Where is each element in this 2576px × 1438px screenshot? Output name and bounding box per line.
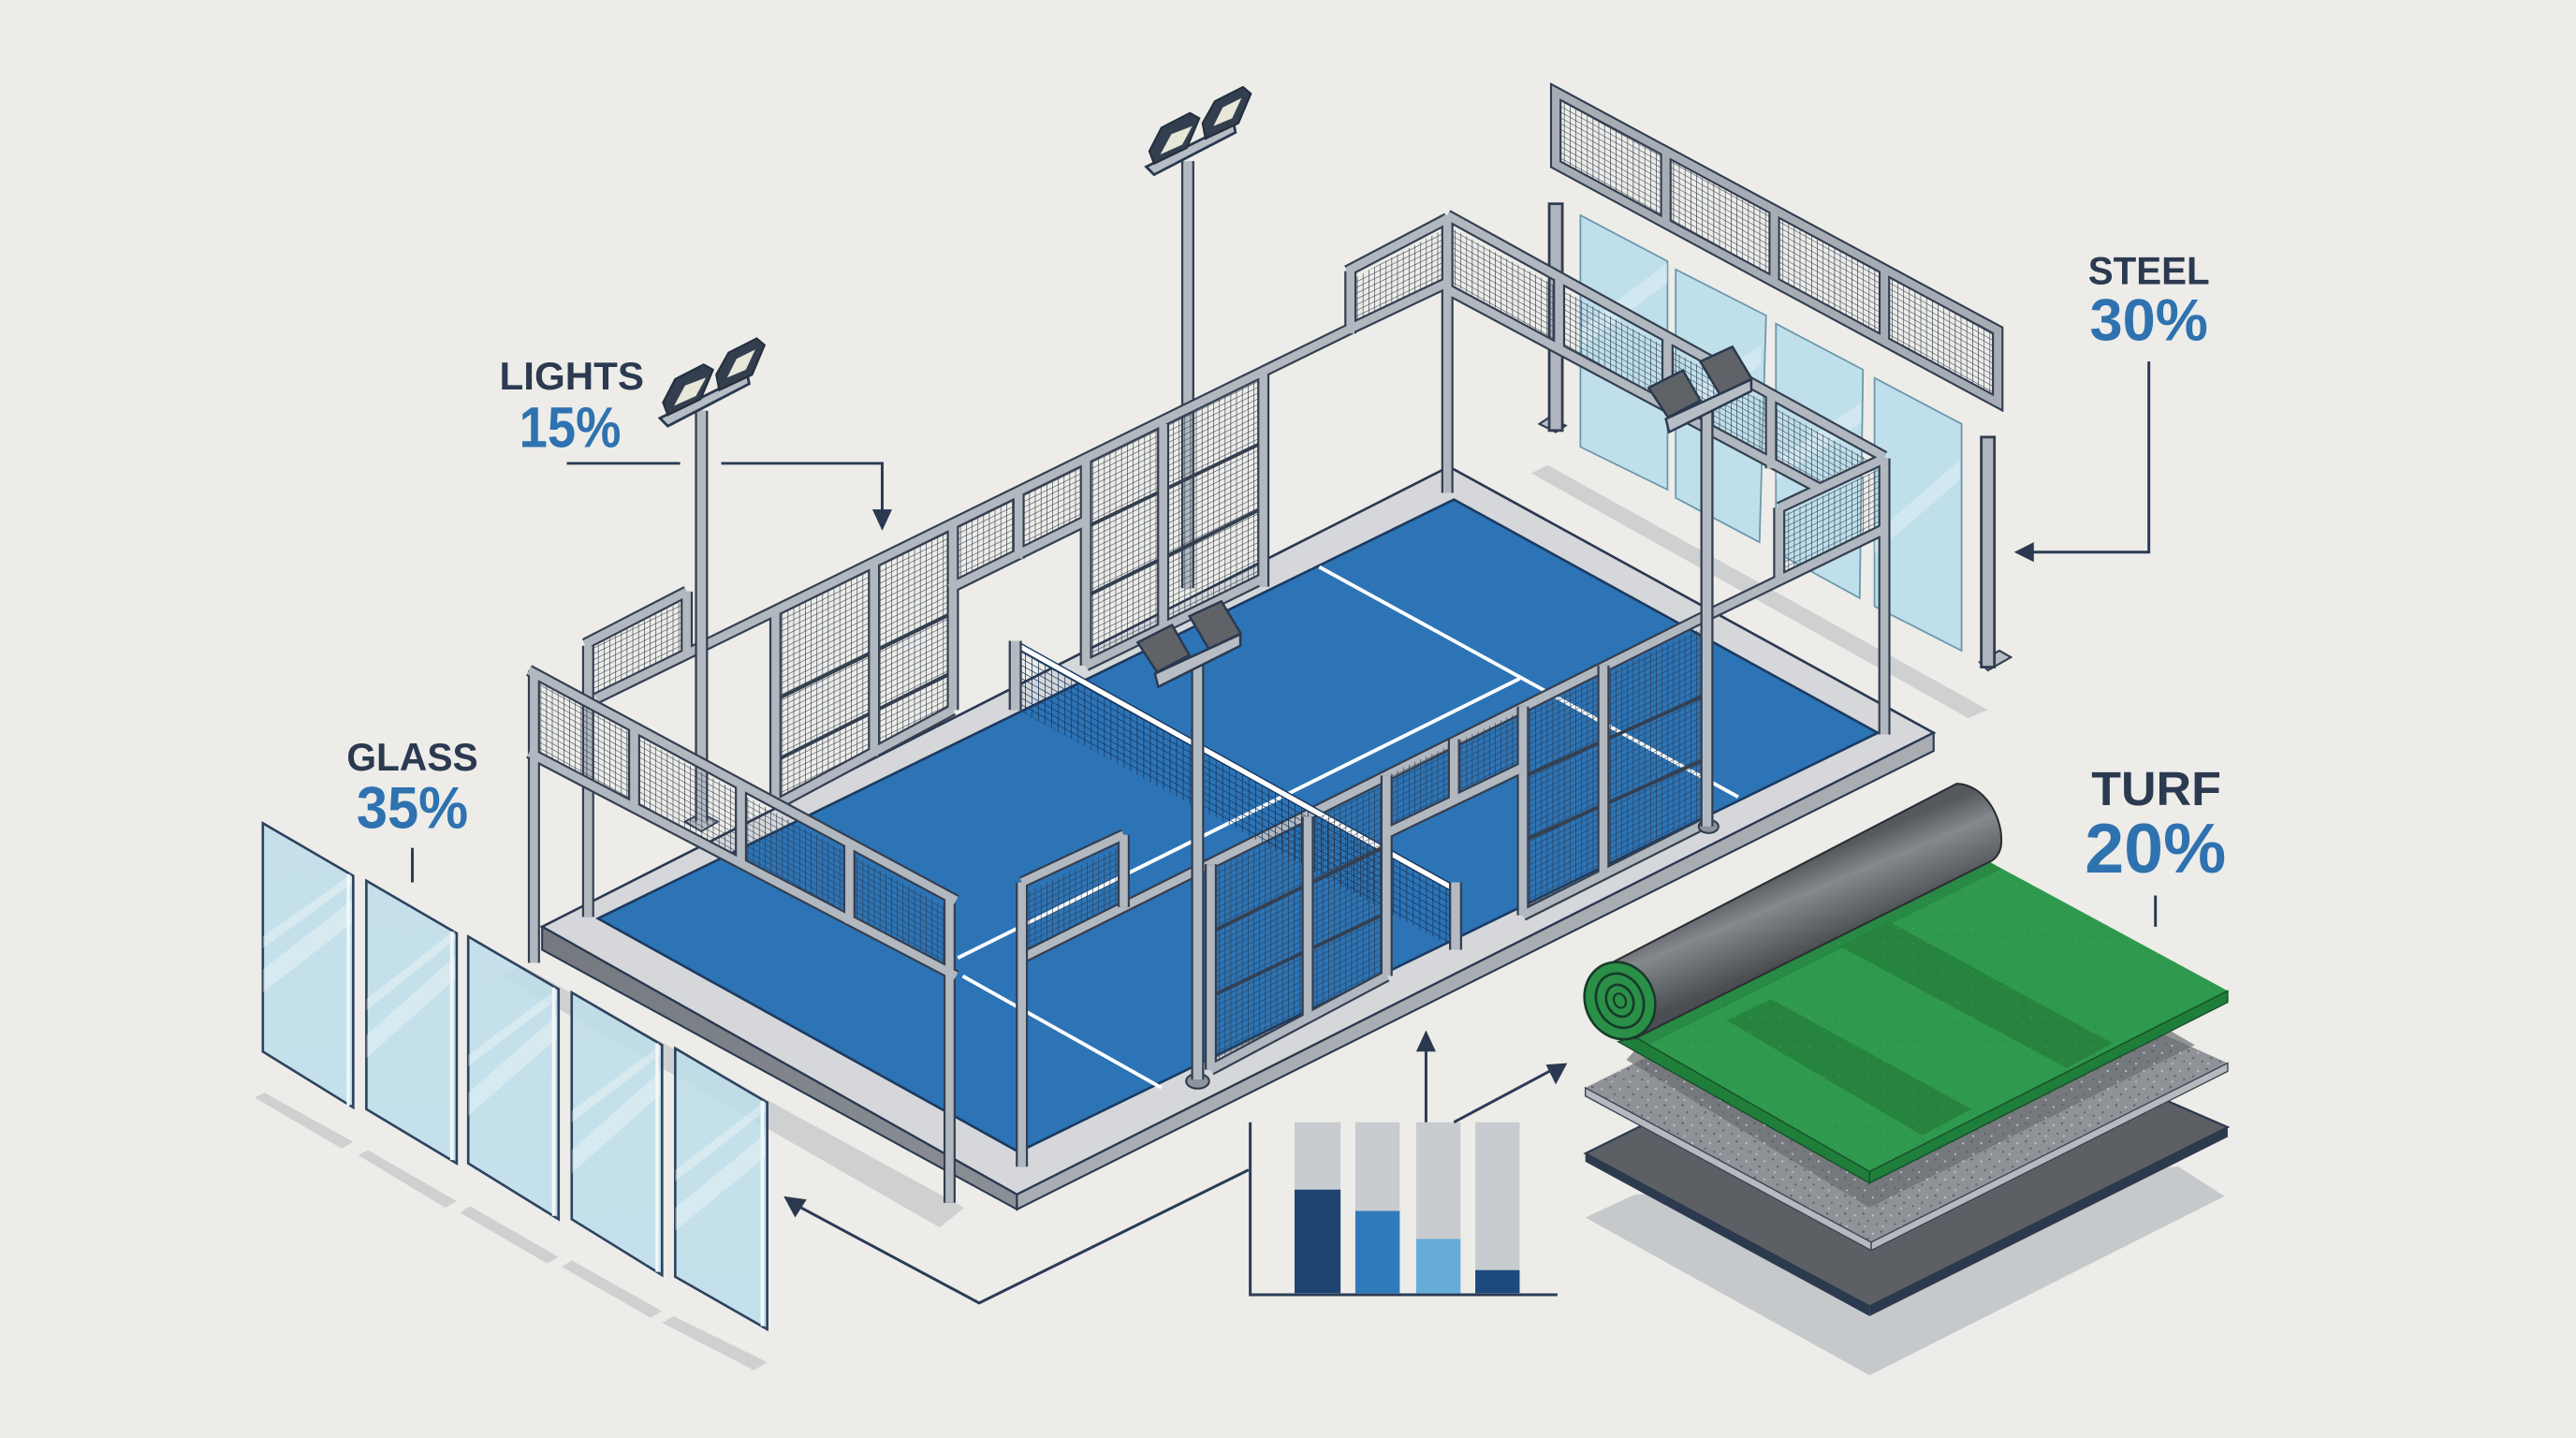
connector arrow from steel <box>2014 361 2149 562</box>
connector arrow to glass <box>783 1170 1249 1303</box>
turf roll <box>1572 784 2001 1051</box>
green turf sheet <box>1618 861 2228 1183</box>
connector arrow to turf <box>1454 1064 1567 1123</box>
mesh panels <box>588 228 1881 805</box>
left steel post <box>1540 204 1566 433</box>
front wall <box>1022 624 1708 1167</box>
chart bars <box>1295 1123 1519 1293</box>
label: glass: 35% <box>357 776 468 842</box>
front end frame <box>529 670 956 1203</box>
steel mesh strip <box>1556 92 1998 403</box>
glass panels <box>263 823 768 1329</box>
bar chart <box>1251 1123 1558 1295</box>
label: glass <box>346 735 478 842</box>
far right light pole <box>1648 346 1751 833</box>
base layer <box>1586 990 2228 1316</box>
ground shadow of right parts <box>1531 465 1988 718</box>
turf stripes <box>1634 861 2113 1136</box>
tennis net <box>1016 640 1456 949</box>
court slab <box>542 466 1934 1210</box>
label: lights <box>500 354 644 460</box>
slab shadow <box>501 966 964 1227</box>
label: turf: TURF <box>2091 762 2221 815</box>
left light pole <box>660 339 765 831</box>
blue playing surface <box>598 500 1878 1152</box>
turf tick <box>2155 896 2157 927</box>
label: steel: 30% <box>2089 287 2208 353</box>
label: steel: STEEL <box>2088 249 2210 293</box>
exploded glass panels, left <box>255 823 768 1371</box>
back light pole <box>1147 87 1251 588</box>
connector arrow from lights <box>567 463 892 531</box>
label: turf <box>2085 762 2226 888</box>
exploded steel and glass parts, right <box>1531 92 2011 718</box>
right steel post <box>1980 437 2011 670</box>
front light pole <box>1137 601 1241 1089</box>
underlay layer <box>1586 923 2228 1251</box>
label: glass: GLASS <box>346 735 478 779</box>
label: turf: 20% <box>2085 809 2226 888</box>
glass tick <box>412 848 414 882</box>
fence braces <box>779 444 1260 759</box>
turf layer stack <box>1572 784 2228 1375</box>
glass panel shadows <box>255 1093 768 1371</box>
right glass panels <box>1580 215 1962 651</box>
label: lights: 15% <box>520 395 621 460</box>
label: lights: LIGHTS <box>500 354 644 398</box>
chart axes <box>1251 1123 1558 1295</box>
court lines <box>958 567 1738 1088</box>
steel frame <box>585 215 1884 958</box>
stack ground shadow <box>1586 1167 2224 1375</box>
underlay shadow from turf <box>1627 1010 2195 1208</box>
label: steel <box>2088 249 2210 353</box>
back walls and fence <box>585 215 1884 958</box>
connector arrow up <box>1416 1030 1436 1123</box>
